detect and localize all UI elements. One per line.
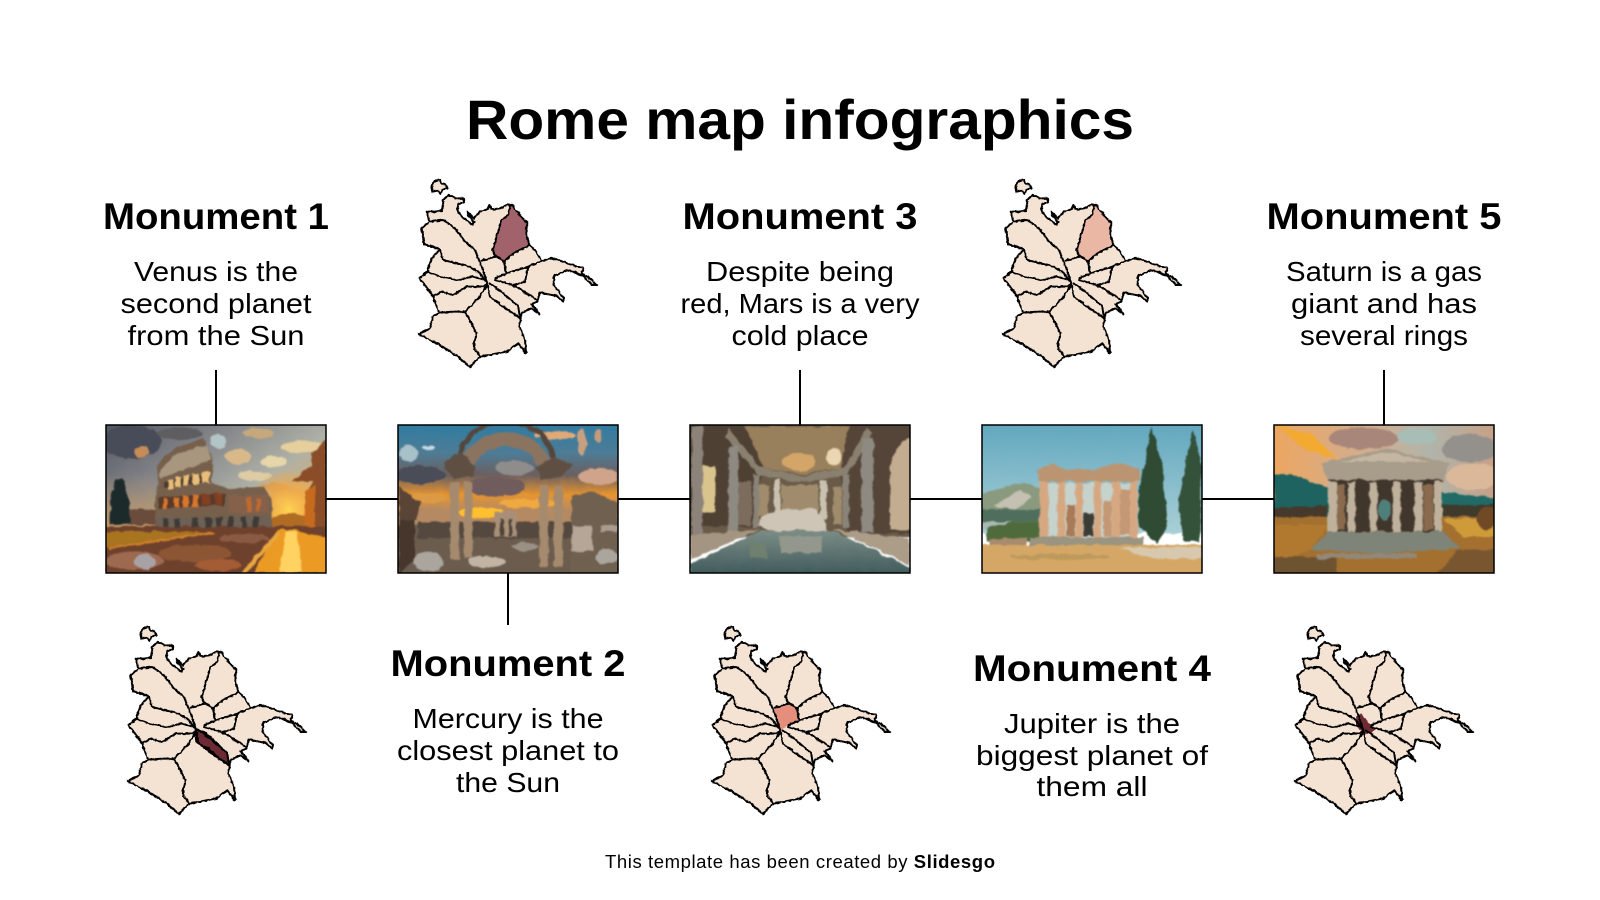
- block: monument 5: several rings: [1300, 320, 1468, 351]
- map: district highlighted for monument 2: [127, 627, 306, 814]
- block: monument 1: [103, 196, 329, 351]
- photo: colosseum at sunset: [105, 424, 327, 574]
- connector lines: [216, 370, 1384, 625]
- map: district highlighted for monument 5: [1294, 627, 1473, 814]
- map: district highlighted for monument 1: [418, 180, 597, 367]
- block: monument 3: Despite being: [706, 256, 894, 287]
- block: monument 1: second planet: [120, 288, 312, 319]
- map: district highlighted for monument 3: [1002, 180, 1181, 367]
- block: monument 2: the Sun: [456, 767, 560, 798]
- block: monument 4: Monument 4: [973, 648, 1211, 689]
- block: monument 1: Venus is the: [134, 256, 298, 287]
- block: monument 3: red, Mars is a very: [680, 288, 920, 319]
- block: monument 4: biggest planet of: [976, 740, 1208, 771]
- block: monument 3: [680, 196, 920, 351]
- block: monument 3: cold place: [732, 320, 868, 351]
- block: monument 1: from the Sun: [128, 320, 304, 351]
- block: monument 5: giant and has: [1291, 288, 1477, 319]
- block: monument 5: Saturn is a gas: [1286, 256, 1482, 287]
- footer credit: This template has been created by Slidesgo: [605, 851, 995, 872]
- block: monument 2: Monument 2: [390, 643, 626, 684]
- block: monument 2: [390, 643, 626, 798]
- block: monument 2: Mercury is the: [412, 703, 604, 734]
- block: monument 1: Monument 1: [103, 196, 329, 237]
- photo: roman bath interior: [683, 420, 917, 575]
- block: monument 5: [1266, 196, 1502, 351]
- photo: greek temple with cypress trees: [977, 420, 1210, 577]
- photo: temple at dusk with hills: [1270, 420, 1500, 577]
- block: monument 2: closest planet to: [397, 735, 619, 766]
- map: district highlighted for monument 4: [711, 627, 890, 814]
- photo: ruined arch at sunset: [397, 424, 619, 574]
- block: monument 4: [973, 648, 1211, 802]
- title: Rome map infographics: [466, 88, 1134, 151]
- block: monument 5: Monument 5: [1266, 196, 1502, 237]
- block: monument 4: them all: [1036, 771, 1148, 802]
- block: monument 4: Jupiter is the: [1004, 708, 1180, 739]
- block: monument 3: Monument 3: [682, 196, 918, 237]
